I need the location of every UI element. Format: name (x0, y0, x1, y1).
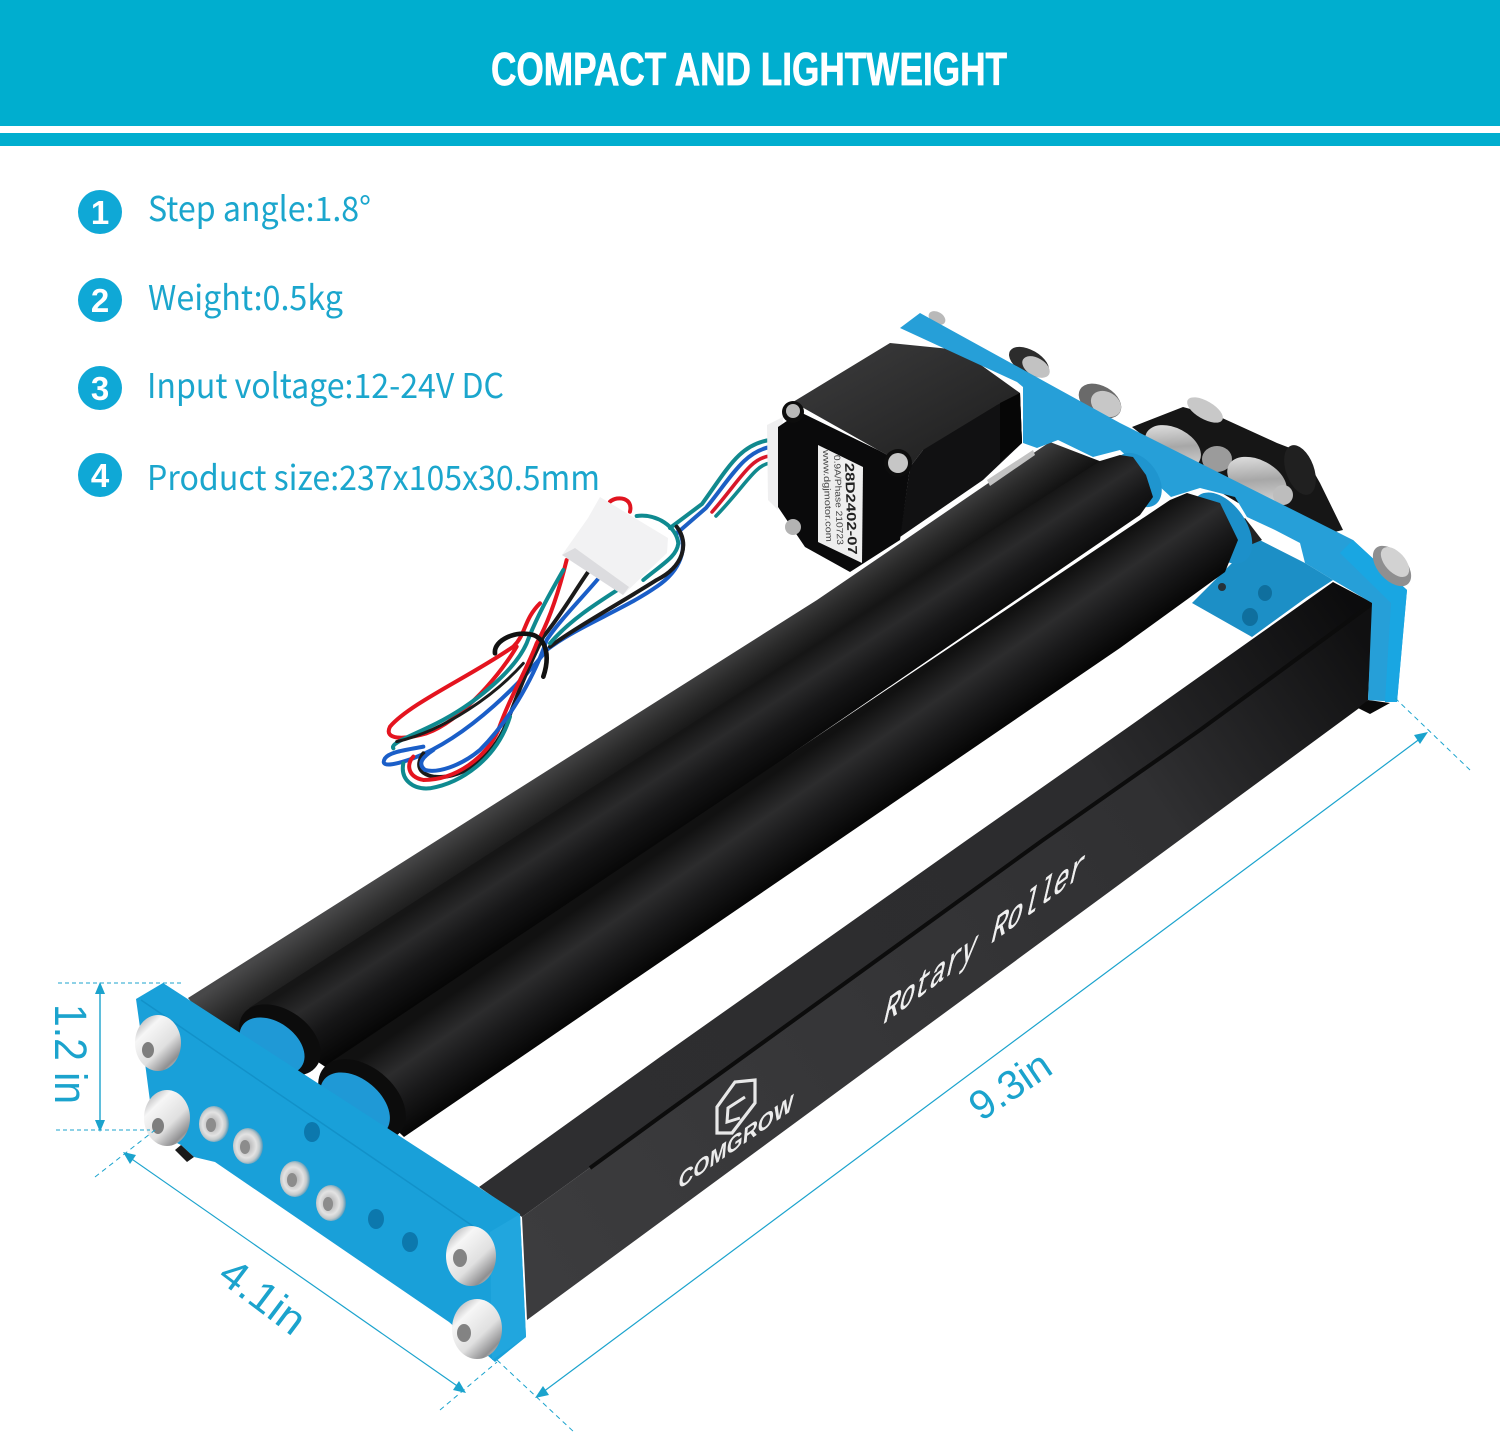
motor label (818, 445, 863, 563)
icon: motor wires and connector (384, 440, 770, 788)
spec 1: step angle (78, 182, 371, 234)
spec 1: step angle: Step angle:1.8° (148, 182, 371, 231)
dimension: height 1.2 in (45, 982, 181, 1132)
spec 3: input voltage: Input voltage:12-24V DC (147, 359, 504, 408)
connector (562, 497, 668, 595)
bolts behind rear plate (926, 308, 1127, 425)
product name on bar: Rotary Roller (879, 842, 1090, 1038)
black rear plate and pulleys (1132, 392, 1343, 540)
motor label: 0.9A/Phase 210723 (832, 455, 845, 545)
logo: COMGROW (678, 1080, 795, 1196)
spec 4: product size: Product size:237x105x30.5mm (147, 451, 600, 500)
spec 3: input voltage: 3 (91, 370, 109, 407)
side bracket (1192, 518, 1333, 637)
near bar (479, 582, 1390, 1320)
rear bar (188, 442, 1140, 1040)
dimension: length 9.3in (497, 698, 1470, 1433)
motor shaft guard (987, 450, 1035, 486)
spec 1: step angle: 1 (91, 194, 109, 231)
spec 4: product size: 4 (91, 457, 110, 494)
logo: COMGROW: COMGROW (678, 1089, 795, 1196)
dimension: height 1.2 in: 1.2 in (45, 1004, 96, 1104)
roller 2 (328, 493, 1238, 1137)
dimension: width 4.1in: 4.1in (211, 1249, 316, 1344)
dimension: length 9.3in: 9.3in (960, 1042, 1060, 1129)
icon: stepper motor (767, 343, 1022, 572)
threaded holes (304, 1122, 418, 1252)
dome bolts (135, 1015, 502, 1359)
spec 2: weight: 2 (91, 282, 109, 319)
front blue plate (135, 983, 526, 1362)
dimension: width 4.1in (95, 1130, 497, 1410)
header band (0, 0, 1500, 146)
far end roller discs (1104, 444, 1265, 575)
spec 2: weight (78, 271, 343, 322)
rear blue plate (900, 313, 1407, 702)
front roller discs (226, 990, 422, 1157)
title: COMPACT AND LIGHTWEIGHT (491, 43, 1007, 95)
spec list (78, 182, 600, 500)
motor label: www.dgjmotor.com (821, 449, 834, 542)
knurled knob (1366, 539, 1418, 593)
roller 1 (249, 455, 1153, 1070)
motor label: 28D2402-07 (842, 463, 860, 555)
knurled screws (199, 1106, 346, 1221)
spec 2: weight: Weight:0.5kg (148, 271, 343, 320)
